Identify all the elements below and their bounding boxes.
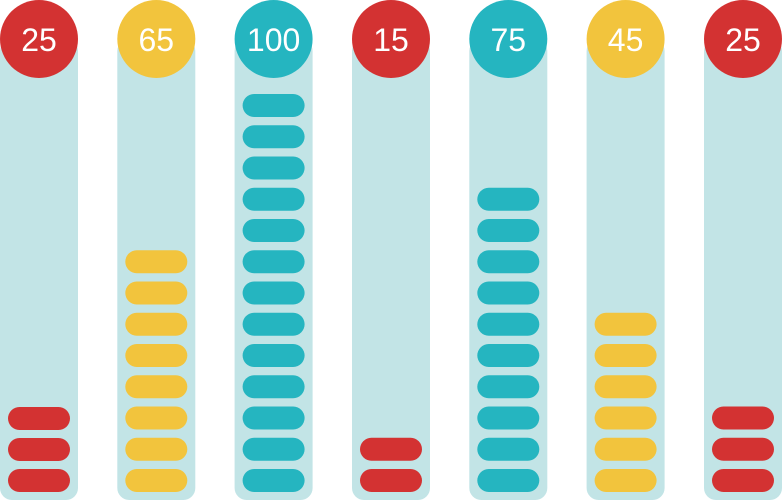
column 5: 75: 75 [491,22,526,58]
column 2: 65: 65 [139,22,174,58]
column 1: 25: 25 [21,22,57,58]
column 2: 65 [117,0,195,500]
column 7: 25: 25 [725,22,761,58]
column 1: 25 [0,0,78,500]
column 6: 45 [587,0,665,500]
column 3: 100: 100 [247,22,300,58]
column 7: 25 [704,0,782,500]
column 4: 15: 15 [373,22,409,58]
column 3: 100 [235,0,313,500]
column 6: 45: 45 [608,22,643,58]
column 5: 75 [469,0,547,500]
column 4: 15 [352,0,430,500]
